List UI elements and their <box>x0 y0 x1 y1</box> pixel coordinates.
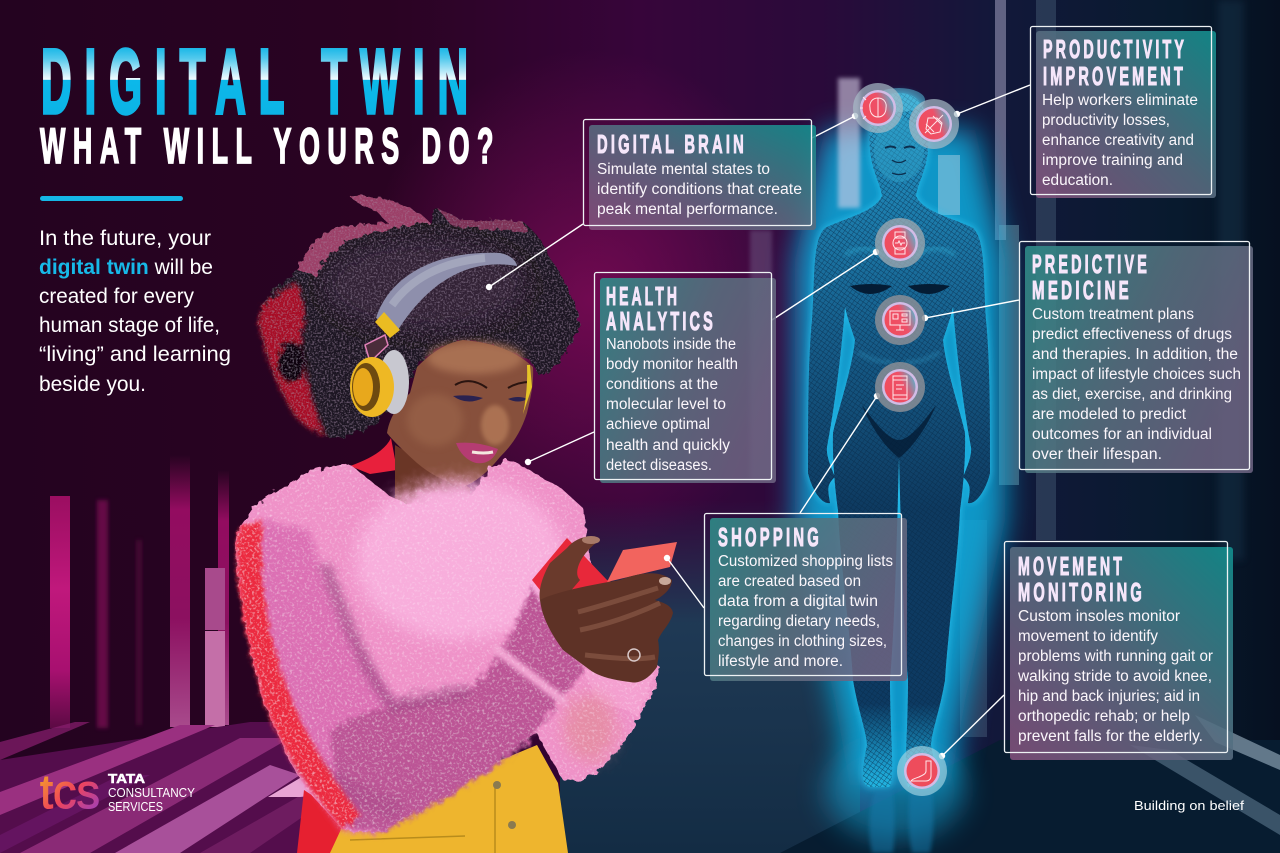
text: health analytics <box>606 336 738 474</box>
text: shopping: are created based on <box>718 573 861 590</box>
red neck light <box>350 438 397 474</box>
text: predictive medicine: predict effectiveness of drugs <box>1032 326 1232 343</box>
text: productivity improvement <box>1042 92 1198 189</box>
heading: predictive medicine: MEDICINE <box>1032 275 1132 305</box>
text: movement monitoring: orthopedic rehab; or help <box>1018 708 1190 725</box>
heading: shopping: SHOPPING <box>718 522 822 552</box>
text: predictive medicine: are modeled to predict <box>1032 406 1187 423</box>
text: predictive medicine: as diet, exercise, and drinking <box>1032 386 1232 403</box>
text: digital brain: Simulate mental states to <box>597 161 770 178</box>
text: digital brain <box>597 161 802 218</box>
blue vertical light bars <box>750 0 1244 737</box>
logo: tcs: SERVICES <box>108 799 163 814</box>
text: DIGITAL TWIN <box>41 31 481 133</box>
text: shopping <box>718 553 893 670</box>
digital twin body figure <box>795 78 1005 853</box>
heading: productivity improvement <box>1043 34 1187 91</box>
heading: movement monitoring <box>1018 551 1145 607</box>
heading: predictive medicine: PREDICTIVE <box>1032 249 1150 279</box>
woman with headphones and phone <box>237 196 677 853</box>
pink vertical light bars <box>50 455 229 728</box>
text: health analytics: Nanobots inside the <box>606 336 736 353</box>
text: predictive medicine: Custom treatment plans <box>1032 306 1194 323</box>
text: predictive medicine: impact of lifestyle choices such <box>1032 366 1241 383</box>
text: predictive medicine <box>1032 306 1241 463</box>
heading: health analytics: ANALYTICS <box>606 306 716 336</box>
intro text: In the future, your <box>39 226 211 250</box>
text: shopping: data from a digital twin <box>718 593 878 610</box>
text: predictive medicine: and therapies. In addition, the <box>1032 346 1238 363</box>
text: shopping: regarding dietary needs, <box>718 613 880 630</box>
title <box>40 31 501 174</box>
text: shopping: lifestyle and more. <box>718 653 843 670</box>
text: productivity improvement: enhance creativity and <box>1042 132 1194 149</box>
leader lines <box>486 85 1030 758</box>
jeans <box>330 745 568 853</box>
hair <box>259 196 580 437</box>
title: WHAT WILL YOURS DO? <box>40 118 501 174</box>
panel: predictive medicine <box>1020 242 1253 473</box>
intro text <box>39 226 231 396</box>
title underline <box>40 196 183 201</box>
heading: digital brain: DIGITAL BRAIN <box>597 129 747 159</box>
logo: tcs: tcs <box>40 766 100 819</box>
icon: brain <box>853 83 903 133</box>
icon: foot insole <box>897 746 947 796</box>
heading: health analytics: HEALTH <box>606 281 680 311</box>
pink floor stripes <box>0 722 330 853</box>
phone <box>532 538 677 666</box>
heading: health analytics <box>606 281 716 336</box>
text: movement monitoring: problems with running gait or <box>1018 648 1213 665</box>
intro text: “living” and learning <box>39 342 231 366</box>
tagline: Building on belief <box>1134 798 1244 813</box>
text: movement monitoring: movement to identify <box>1018 628 1158 645</box>
text: predictive medicine: over their lifespan. <box>1032 446 1162 463</box>
text: movement monitoring: hip and back injuries; aid in <box>1018 688 1200 705</box>
text: health analytics: conditions at the <box>606 376 718 393</box>
panel: productivity improvement <box>1030 26 1216 198</box>
heading: predictive medicine <box>1032 249 1150 305</box>
text: movement monitoring: prevent falls for the elderly. <box>1018 728 1203 745</box>
panel: digital brain <box>584 120 816 230</box>
text: productivity improvement: improve training and <box>1042 152 1183 169</box>
headphones <box>350 253 517 417</box>
icon: productivity <box>909 99 959 149</box>
intro text: beside you. <box>39 372 146 396</box>
text: health analytics: detect diseases. <box>606 457 712 474</box>
text: health analytics: health and quickly <box>606 437 730 454</box>
panel: movement monitoring <box>1004 542 1233 760</box>
icon: medicine qr <box>875 295 925 345</box>
text: productivity improvement: Help workers eliminate <box>1042 92 1198 109</box>
intro text: human stage of life, <box>39 313 220 337</box>
icon: health watch <box>875 218 925 268</box>
heading: movement monitoring: MOVEMENT <box>1018 551 1125 581</box>
panel: health analytics <box>594 272 776 483</box>
hands <box>540 536 673 682</box>
text: movement monitoring: Custom insoles monitor <box>1018 608 1180 625</box>
text: movement monitoring: walking stride to avoid knee, <box>1017 668 1212 685</box>
text: digital brain: identify conditions that create <box>597 181 802 198</box>
intro text: created for every <box>39 284 194 308</box>
icon: shopping phone <box>875 362 925 412</box>
sweater <box>237 460 660 833</box>
logo: tcs: CONSULTANCY <box>108 785 195 800</box>
logo: tcs <box>40 766 195 819</box>
text: health analytics: achieve optimal <box>606 416 710 433</box>
red side backdrop <box>297 790 350 853</box>
blue floor stripes <box>780 715 1280 853</box>
intro text: digital twin will be <box>39 255 213 279</box>
text: productivity improvement: productivity losses, <box>1042 112 1170 129</box>
face <box>387 340 533 487</box>
text: productivity improvement: education. <box>1042 172 1113 189</box>
text: movement monitoring <box>1017 608 1213 745</box>
text: health analytics: molecular level to <box>606 396 726 413</box>
text: health analytics: body monitor health <box>606 356 738 373</box>
neck <box>395 445 470 512</box>
heading: movement monitoring: MONITORING <box>1018 577 1145 607</box>
panel: shopping <box>704 514 907 681</box>
text: shopping: changes in clothing sizes, <box>718 633 887 650</box>
logo: tcs: TATA <box>108 771 146 786</box>
text: predictive medicine: outcomes for an individual <box>1032 426 1212 443</box>
text: digital brain: peak mental performance. <box>597 201 778 218</box>
text: shopping: Customized shopping lists <box>718 553 893 570</box>
